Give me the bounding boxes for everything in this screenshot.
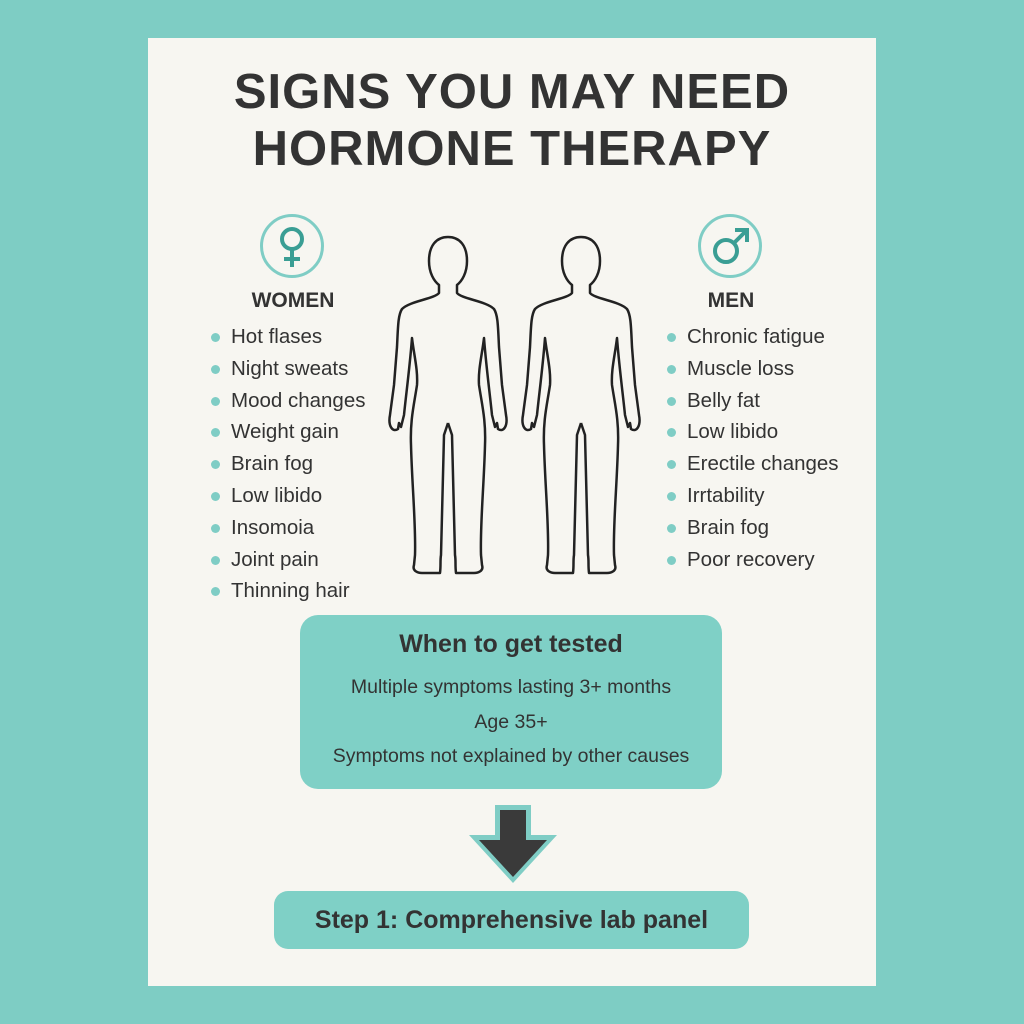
list: women symptoms — [211, 325, 365, 602]
icon: male symbol — [698, 214, 762, 278]
list: men symptoms: Belly fat — [687, 389, 760, 412]
heading: when to get tested: When to get tested — [399, 630, 623, 658]
list: men symptoms: Poor recovery — [687, 548, 815, 571]
list: women symptoms: Weight gain — [231, 420, 339, 443]
list: women symptoms: Hot flases — [231, 325, 322, 348]
list: women symptoms: Low libido — [231, 484, 322, 507]
arrow: down — [469, 805, 557, 883]
text: criteria — [333, 676, 689, 767]
panel: background card — [148, 38, 876, 986]
list: men symptoms: Low libido — [687, 420, 778, 443]
list: women symptoms: Night sweats — [231, 357, 348, 380]
list: men symptoms — [667, 325, 839, 571]
heading: women: WOMEN — [252, 289, 334, 312]
list: men symptoms: Irrtability — [687, 484, 764, 507]
list: women symptoms: Insomoia — [231, 516, 314, 539]
list: men symptoms: Brain fog — [687, 516, 769, 539]
text: criteria: Age 35+ — [474, 710, 548, 732]
list: women symptoms: Mood changes — [231, 389, 365, 412]
callout: when to get tested — [300, 615, 722, 789]
title: SIGNS YOU MAY NEED — [234, 65, 790, 119]
text: criteria: Multiple symptoms lasting 3+ months — [351, 676, 671, 698]
list: women symptoms: Joint pain — [231, 548, 319, 571]
list: men symptoms: Erectile changes — [687, 452, 839, 475]
text: criteria: Symptoms not explained by other causes — [333, 745, 689, 767]
list: women symptoms: Thinning hair — [231, 579, 350, 602]
callout: step 1: Step 1: Comprehensive lab panel — [315, 906, 708, 934]
title — [234, 65, 790, 176]
list: men symptoms: Chronic fatigue — [687, 325, 825, 348]
title: HORMONE THERAPY — [253, 122, 771, 176]
heading: men: MEN — [708, 289, 754, 312]
icon: female symbol — [260, 214, 324, 278]
list: women symptoms: Brain fog — [231, 452, 313, 475]
callout: step 1 — [274, 891, 749, 949]
list: men symptoms: Muscle loss — [687, 357, 794, 380]
illustration: two body outlines — [388, 236, 641, 574]
